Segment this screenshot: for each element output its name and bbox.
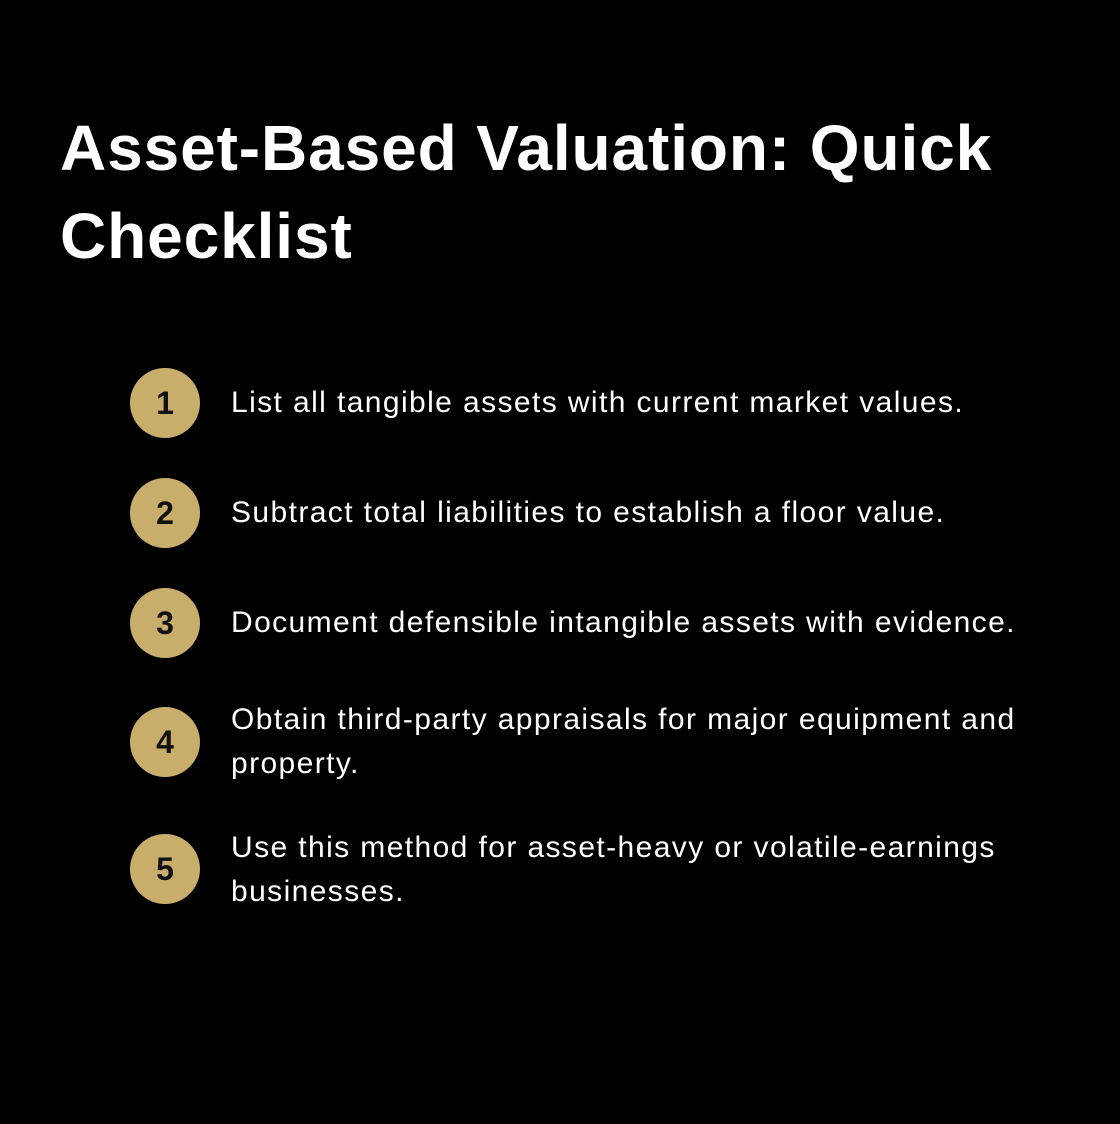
badge 1: 1 [156, 385, 174, 421]
item 3 [130, 588, 1016, 658]
item 4 [130, 703, 1016, 780]
item 5 [130, 831, 996, 908]
text 5 [231, 831, 996, 908]
item 1 [130, 368, 964, 438]
badge 4: 4 [156, 724, 174, 760]
text 1: List all tangible assets with current market values. [231, 386, 964, 419]
title: Asset-Based Valuation: Quick Checklist [60, 112, 992, 272]
badge 3: 3 [156, 605, 174, 641]
badge 5 [130, 834, 200, 904]
text 5: Use this method for asset-heavy or volatile-earnings [231, 831, 996, 864]
item 2 [130, 478, 945, 548]
text 5: businesses. [231, 875, 405, 908]
badge 1 [130, 368, 200, 438]
badge 2 [130, 478, 200, 548]
text 2: Subtract total liabilities to establish a floor value. [231, 496, 945, 529]
text 4 [231, 703, 1016, 780]
text 3: Document defensible intangible assets with evidence. [231, 606, 1016, 639]
badge 4 [130, 707, 200, 777]
badge 3 [130, 588, 200, 658]
badge 5: 5 [156, 851, 174, 887]
badge 2: 2 [156, 495, 174, 531]
text 4: property. [231, 747, 360, 780]
text 4: Obtain third-party appraisals for major equipment and [231, 703, 1016, 736]
